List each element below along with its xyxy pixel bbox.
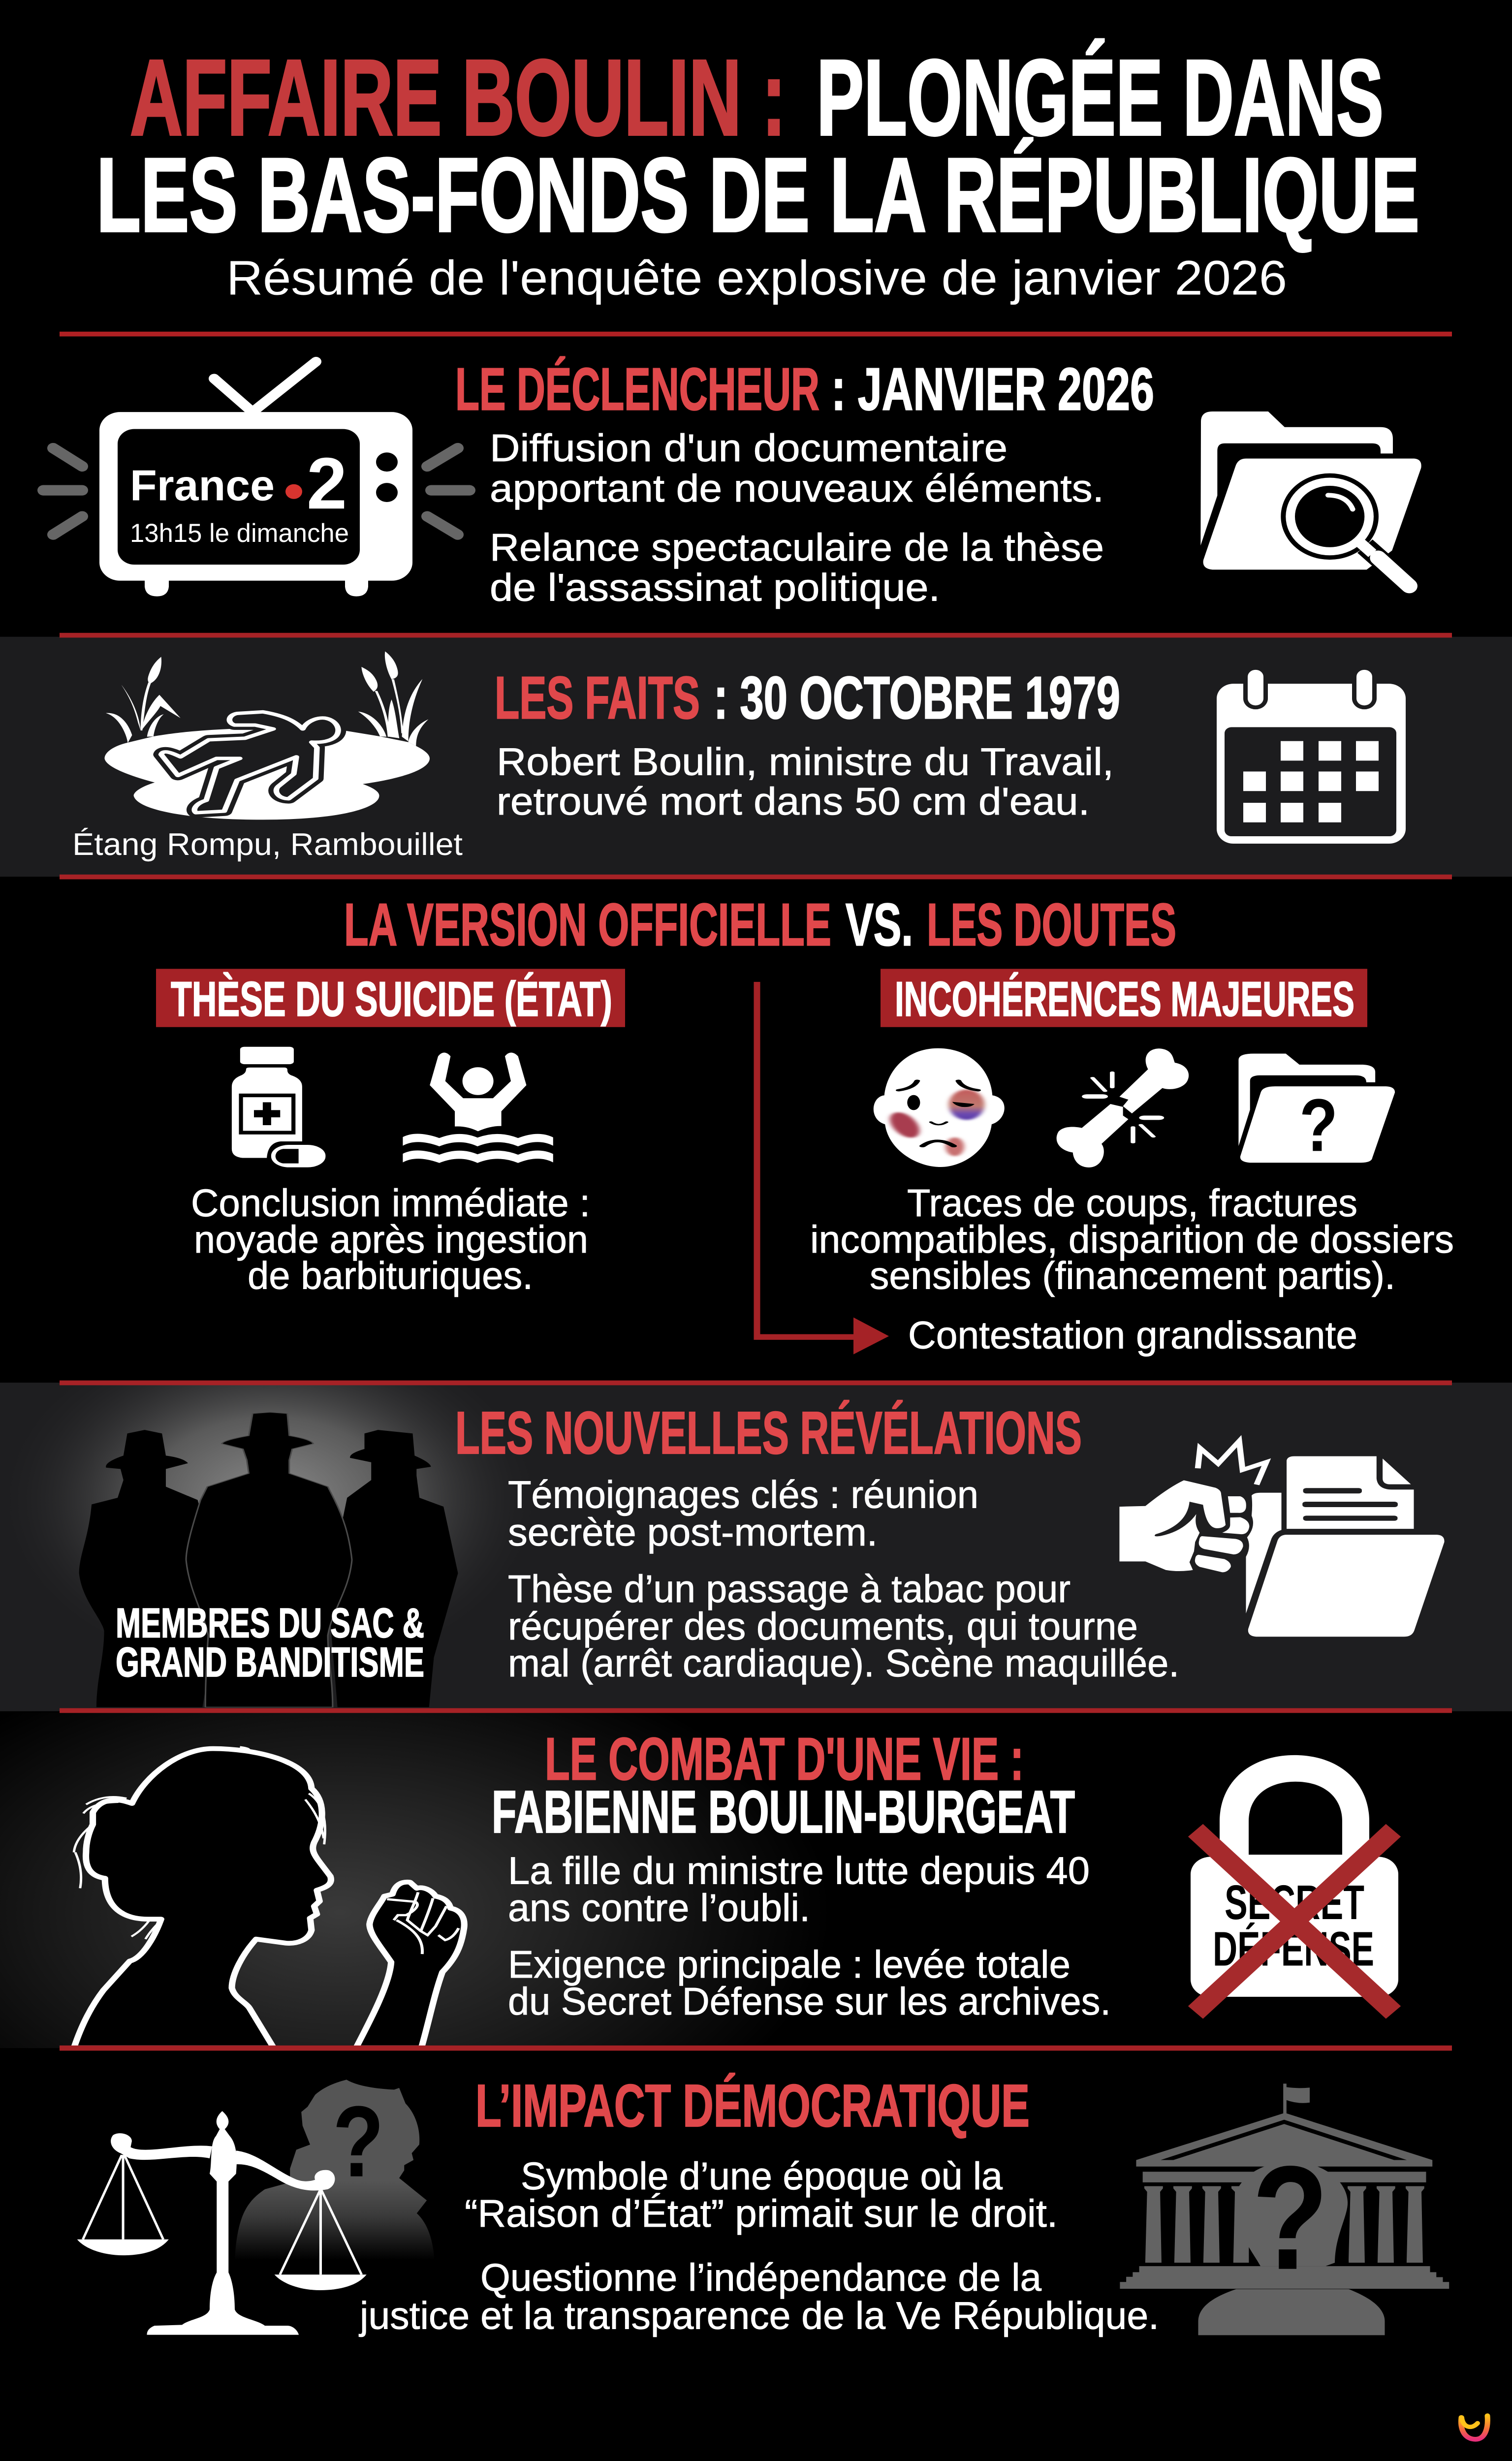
icon: television France 2 xyxy=(43,362,470,597)
text block: incohérences: Traces de coups, fractures xyxy=(907,1181,1357,1225)
text block: Symbole d’une époque où la xyxy=(521,2154,1003,2198)
heading xyxy=(492,1726,1075,1846)
text block: Exigence principale : levée totale xyxy=(508,1942,1071,1986)
text block xyxy=(490,426,1104,609)
title xyxy=(96,37,1419,254)
heading: LA VERSION OFFICIELLE xyxy=(344,891,831,958)
panel: le combat d'une vie xyxy=(0,1708,1512,2048)
panel: version officielle vs doutes xyxy=(156,891,1454,1357)
text block: Diffusion d'un documentaire xyxy=(490,426,1008,470)
icon: folder with question mark xyxy=(1238,1054,1395,1167)
text block: Thèse d’un passage à tabac pour xyxy=(508,1567,1071,1610)
icon: bruised face xyxy=(874,1048,1005,1167)
label: thèse du suicide xyxy=(156,969,625,1027)
panel: les nouvelles révélations xyxy=(0,1381,1512,1711)
text block xyxy=(508,1473,1179,1685)
icon: medicine bottle xyxy=(232,1047,325,1167)
text: contestation: Contestation grandissante xyxy=(908,1313,1357,1357)
icon: padlock secret défense crossed out xyxy=(1191,1755,1398,2013)
heading: LE COMBAT D'UNE VIE : xyxy=(545,1726,1024,1793)
text block: conclusion: noyade après ingestion xyxy=(194,1218,588,1261)
text block: “Raison d’État” primait sur le droit. xyxy=(465,2191,1058,2235)
text block: récupérer des documents, qui tourne xyxy=(508,1604,1138,1648)
text block xyxy=(508,1849,1111,2023)
icon: folder with magnifier xyxy=(1200,411,1421,586)
text block: Témoignages clés : réunion xyxy=(508,1473,978,1516)
icon: three men silhouettes xyxy=(79,1412,458,1707)
caption: membres du SAC: MEMBRES DU SAC & xyxy=(116,1600,424,1646)
icon: folder with question mark: ? xyxy=(1299,1084,1338,1167)
text block xyxy=(358,2154,1159,2337)
caption: membres du SAC xyxy=(116,1600,424,1686)
heading: L’IMPACT DÉMOCRATIQUE xyxy=(475,2073,1030,2140)
heading: LE DÉCLENCHEUR xyxy=(455,356,819,423)
caption: Étang Rompu, Rambouillet xyxy=(72,827,463,862)
text block: Relance spectaculaire de la thèse xyxy=(490,526,1104,569)
icon: pond with body outline xyxy=(104,651,430,820)
text block: retrouvé mort dans 50 cm d'eau. xyxy=(497,779,1090,823)
icon: shadow figure with question mark: ? xyxy=(333,2085,384,2198)
heading: LES NOUVELLES RÉVÉLATIONS xyxy=(455,1400,1082,1467)
icon: television France 2: France xyxy=(130,461,275,510)
text block xyxy=(497,740,1114,823)
arrow xyxy=(757,982,889,1355)
icon: broken bone xyxy=(1057,1048,1189,1167)
text block: incohérences: sensibles (financement partis). xyxy=(870,1254,1395,1297)
heading: : 30 OCTOBRE 1979 xyxy=(714,664,1120,731)
text block: apportant de nouveaux éléments. xyxy=(490,467,1104,510)
text block: du Secret Défense sur les archives. xyxy=(508,1980,1111,2023)
text block: conclusion xyxy=(191,1181,590,1297)
text block: conclusion: de barbituriques. xyxy=(248,1254,533,1297)
text block: de l'assassinat politique. xyxy=(490,566,940,609)
title: AFFAIRE BOULIN : xyxy=(130,37,786,158)
text block: Robert Boulin, ministre du Travail, xyxy=(497,740,1114,783)
label: thèse du suicide: THÈSE DU SUICIDE (ÉTAT) xyxy=(171,972,612,1026)
panel: le déclencheur xyxy=(43,356,1421,609)
text block: incohérences xyxy=(810,1181,1454,1297)
icon: woman silhouette with raised fist xyxy=(74,1747,464,2048)
panel: l'impact démocratique xyxy=(77,2073,1449,2337)
icon: shadow figure with question mark xyxy=(235,2080,434,2260)
icon: fist and folder xyxy=(1119,1441,1445,1637)
panel: les faits xyxy=(0,633,1512,879)
icon: government building with anonymous figure xyxy=(1120,2083,1449,2335)
text block: justice et la transparence de la Ve République. xyxy=(358,2294,1159,2337)
text block: secrète post-mortem. xyxy=(508,1511,878,1554)
heading: FABIENNE BOULIN-BURGEAT xyxy=(492,1779,1075,1846)
subtitle: Résumé de l'enquête explosive de janvier 2026 xyxy=(226,251,1287,305)
heading: : JANVIER 2026 xyxy=(831,356,1154,423)
icon: calendar xyxy=(1217,665,1406,844)
text block: conclusion: Conclusion immédiate : xyxy=(191,1181,590,1225)
text block: ans contre l’oubli. xyxy=(508,1886,810,1929)
text block: La fille du ministre lutte depuis 40 xyxy=(508,1849,1090,1892)
text block: Questionne l’indépendance de la xyxy=(480,2255,1041,2299)
text block: mal (arrêt cardiaque). Scène maquillée. xyxy=(508,1641,1179,1685)
icon: television France 2: 13h15 le dimanche xyxy=(130,519,349,548)
icon: government building with anonymous figure: ? xyxy=(1252,2136,1328,2301)
icon: scales of justice xyxy=(77,2111,367,2335)
heading: LES DOUTES xyxy=(927,891,1176,958)
icon: padlock secret défense crossed out: DÉFENSE xyxy=(1213,1922,1374,1976)
heading: LES FAITS xyxy=(495,664,700,731)
heading xyxy=(495,664,1120,731)
icon: logo xyxy=(1461,2416,1487,2439)
icon: television France 2: 2 xyxy=(307,442,347,524)
icon: padlock secret défense crossed out: SECRET xyxy=(1225,1875,1364,1929)
icon: drowning person xyxy=(403,1053,553,1163)
heading: VS. xyxy=(846,891,913,958)
caption: membres du SAC: GRAND BANDITISME xyxy=(116,1639,424,1686)
